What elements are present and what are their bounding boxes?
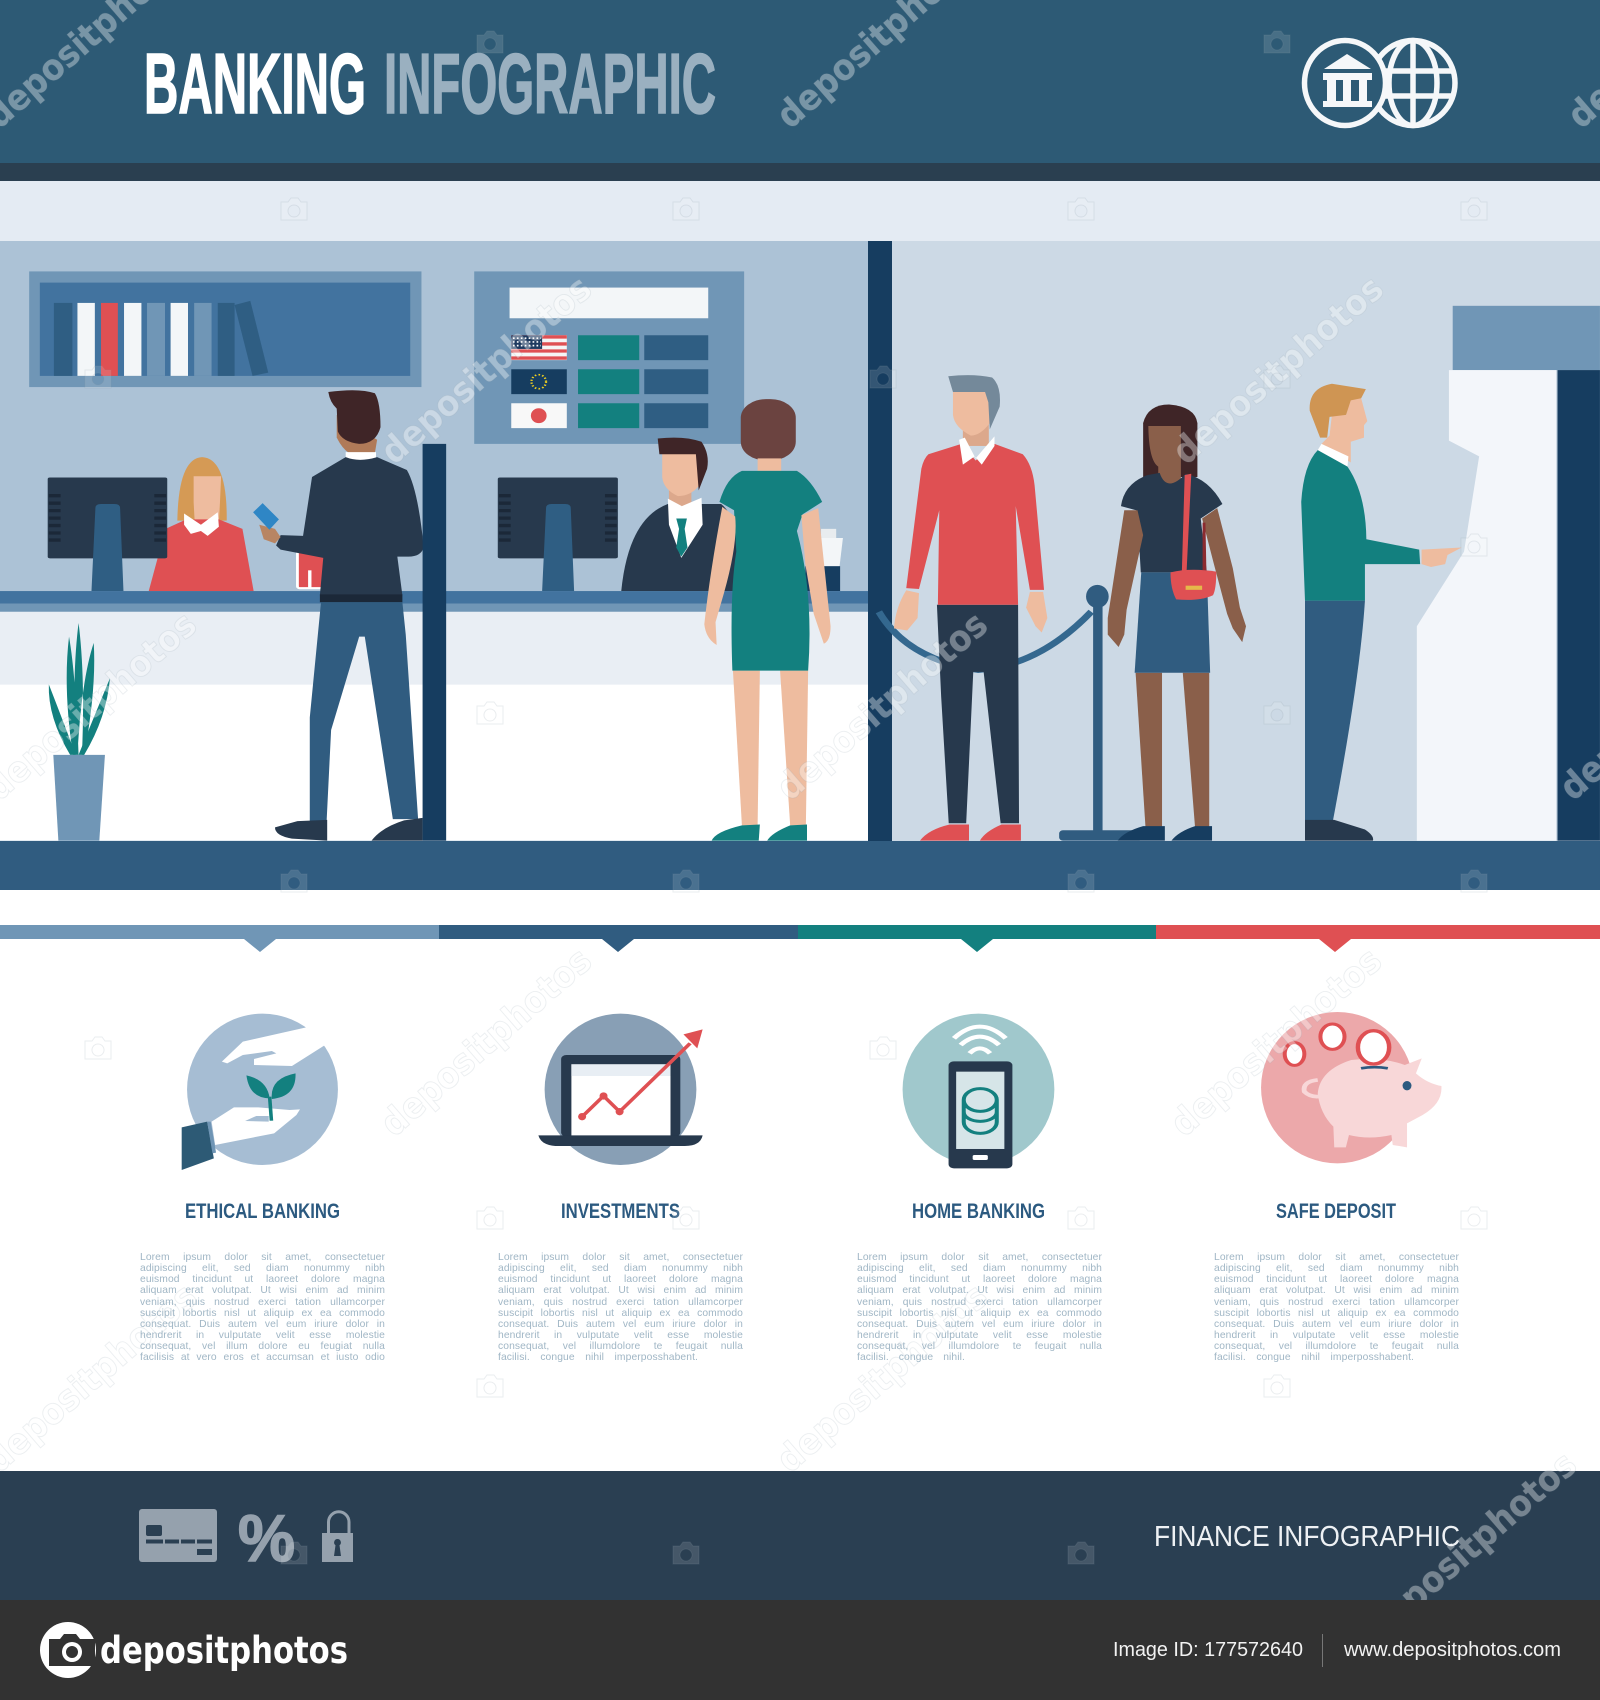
body text: investments: suscipit lobortis nisl ut aliquip ex ea commodo bbox=[498, 1308, 743, 1319]
watermarks: depositphotos bbox=[1358, 1444, 1585, 1649]
body text: investments: facilisi. congue nihil imperposshabent. bbox=[498, 1352, 698, 1363]
body text: ethical banking: consequat, vel illum dolore eu feugiat nulla bbox=[140, 1341, 385, 1352]
icon: investments bbox=[538, 1014, 703, 1165]
body text: ethical banking: aliquam erat volutpat. Ut wisi enim ad minim bbox=[140, 1285, 385, 1296]
icon: ethical banking bbox=[182, 1014, 338, 1170]
body text: safe deposit: facilisi. congue nihil imperposshabent. bbox=[1214, 1352, 1414, 1363]
tablet behind customer bbox=[297, 552, 325, 589]
bank interior left bbox=[0, 241, 1600, 841]
watermarks: depositphotos bbox=[769, 1276, 996, 1481]
body text: ethical banking: Lorem ipsum dolor sit amet, consectetuer bbox=[140, 1252, 385, 1263]
body text: home banking: aliquam erat volutpat. Ut wisi enim ad minim bbox=[857, 1285, 1102, 1296]
body text: safe deposit: consequat, vel illumdolore te feugait nulla bbox=[1214, 1341, 1459, 1352]
attribution strip bbox=[0, 1600, 1600, 1700]
body text: investments: Lorem ipsum dolor sit amet, consectetuer bbox=[498, 1252, 743, 1263]
watermarks: depositphotos bbox=[373, 268, 600, 473]
title: BANKING bbox=[144, 37, 366, 132]
body text: home banking: Lorem ipsum dolor sit amet, consectetuer bbox=[857, 1252, 1102, 1263]
scene right: queue and ATM bbox=[879, 306, 1600, 841]
body text: home banking: euismod tincidunt ut laoreet dolore magna bbox=[857, 1274, 1102, 1285]
icon: percent: % bbox=[238, 1501, 295, 1575]
body text: home banking: adipiscing elit, sed diam nonummy nibh bbox=[857, 1263, 1102, 1274]
body text: safe deposit bbox=[1214, 1252, 1459, 1363]
glass divider bbox=[423, 444, 446, 841]
customer man at counter bbox=[253, 390, 424, 841]
body text: safe deposit: aliquam erat volutpat. Ut wisi enim ad minim bbox=[1214, 1285, 1459, 1296]
heading: investments: INVESTMENTS bbox=[561, 1200, 680, 1223]
body text: investments: consequat, vel illumdolore te feugait nulla bbox=[498, 1341, 743, 1352]
body text: home banking: veniam, quis nostrud exerci tation ullamcorper bbox=[857, 1297, 1102, 1308]
body text: investments: hendrerit in vulputate velit esse molestie bbox=[498, 1330, 743, 1341]
exchange rate board bbox=[474, 271, 744, 444]
heading: home banking: HOME BANKING bbox=[912, 1200, 1045, 1223]
body text: investments: consequat. Duis autem vel eum iriure dolor in bbox=[498, 1319, 743, 1330]
body text: ethical banking: facilisis at vero eros et accumsan et iusto odio bbox=[140, 1352, 385, 1363]
icon: home banking bbox=[903, 1014, 1054, 1168]
body text: safe deposit: adipiscing elit, sed diam nonummy nibh bbox=[1214, 1263, 1459, 1274]
scene left: teller counters bbox=[0, 271, 868, 841]
woman in green dress bbox=[704, 399, 831, 841]
body text: safe deposit: hendrerit in vulputate velit esse molestie bbox=[1214, 1330, 1459, 1341]
title: INFOGRAPHIC bbox=[384, 37, 716, 132]
body text: safe deposit: veniam, quis nostrud exerci tation ullamcorper bbox=[1214, 1297, 1459, 1308]
bookshelf bbox=[29, 271, 421, 387]
icon: credit card bbox=[139, 1509, 217, 1562]
body text: ethical banking: suscipit lobortis nisl ut aliquip ex ea commodo bbox=[140, 1308, 385, 1319]
icon: safe deposit bbox=[1261, 1012, 1441, 1163]
website url: www.depositphotos.com bbox=[1343, 1639, 1561, 1661]
body text: investments bbox=[498, 1252, 743, 1363]
body text: investments: aliquam erat volutpat. Ut wisi enim ad minim bbox=[498, 1285, 743, 1296]
teller woman bbox=[149, 457, 254, 591]
watermarks: depositphotos bbox=[373, 940, 600, 1145]
body text: home banking: suscipit lobortis nisl ut aliquip ex ea commodo bbox=[857, 1308, 1102, 1319]
separator bbox=[1322, 1634, 1323, 1667]
header band bbox=[0, 0, 1600, 241]
body text: ethical banking: hendrerit in vulputate velit esse molestie bbox=[140, 1330, 385, 1341]
body text: home banking: facilisi. congue nihil. bbox=[857, 1352, 965, 1363]
computer monitors bbox=[48, 477, 618, 591]
watermarks: depositphotos bbox=[1163, 940, 1390, 1145]
image id: Image ID: 177572640 bbox=[1113, 1639, 1303, 1661]
body text: home banking bbox=[857, 1252, 1102, 1363]
footer tagline: FINANCE INFOGRAPHIC bbox=[1154, 1521, 1460, 1553]
body text: safe deposit: Lorem ipsum dolor sit amet, consectetuer bbox=[1214, 1252, 1459, 1263]
icon: bank and globe bbox=[1304, 40, 1455, 126]
body text: safe deposit: euismod tincidunt ut laoreet dolore magna bbox=[1214, 1274, 1459, 1285]
body text: investments: adipiscing elit, sed diam nonummy nibh bbox=[498, 1263, 743, 1274]
watermarks: depositphotos bbox=[1165, 268, 1392, 473]
counter bbox=[0, 591, 868, 841]
watermarks: depositphotos bbox=[769, 604, 996, 809]
floor bbox=[0, 841, 1600, 890]
title bbox=[144, 37, 716, 132]
rope barrier bbox=[879, 585, 1143, 841]
body text: ethical banking: euismod tincidunt ut laoreet dolore magna bbox=[140, 1274, 385, 1285]
ATM machine bbox=[1417, 306, 1600, 841]
clerk man bbox=[621, 438, 740, 591]
man in red sweater bbox=[894, 375, 1047, 841]
central wall bbox=[868, 241, 892, 841]
woman with red bag bbox=[1108, 404, 1246, 841]
body text: home banking: hendrerit in vulputate velit esse molestie bbox=[857, 1330, 1102, 1341]
body text: investments: euismod tincidunt ut laoreet dolore magna bbox=[498, 1274, 743, 1285]
body text: safe deposit: consequat. Duis autem vel eum iriure dolor in bbox=[1214, 1319, 1459, 1330]
body text: safe deposit: suscipit lobortis nisl ut aliquip ex ea commodo bbox=[1214, 1308, 1459, 1319]
depositphotos logo bbox=[40, 1622, 348, 1678]
heading: safe deposit: SAFE DEPOSIT bbox=[1276, 1200, 1396, 1223]
body text: investments: veniam, quis nostrud exerci tation ullamcorper bbox=[498, 1297, 743, 1308]
heading: ethical banking: ETHICAL BANKING bbox=[185, 1200, 340, 1223]
man at ATM bbox=[1301, 384, 1462, 841]
bottom band bbox=[0, 1471, 1600, 1600]
icon: padlock bbox=[322, 1512, 353, 1562]
body text: home banking: consequat, vel illumdolore te feugait nulla bbox=[857, 1341, 1102, 1352]
body text: home banking: consequat. Duis autem vel eum iriure dolor in bbox=[857, 1319, 1102, 1330]
body text: ethical banking: adipiscing elit, sed diam nonummy nibh bbox=[140, 1263, 385, 1274]
body text: ethical banking: consequat. Duis autem vel eum iriure dolor in bbox=[140, 1319, 385, 1330]
body text: ethical banking: veniam, quis nostrud exerci tation ullamcorper bbox=[140, 1297, 385, 1308]
coffee cup bbox=[805, 529, 843, 591]
plant bbox=[49, 623, 110, 841]
depositphotos logo: depositphotos bbox=[100, 1629, 348, 1672]
section stripe with pointers bbox=[0, 925, 1600, 952]
body text: ethical banking bbox=[140, 1252, 385, 1363]
